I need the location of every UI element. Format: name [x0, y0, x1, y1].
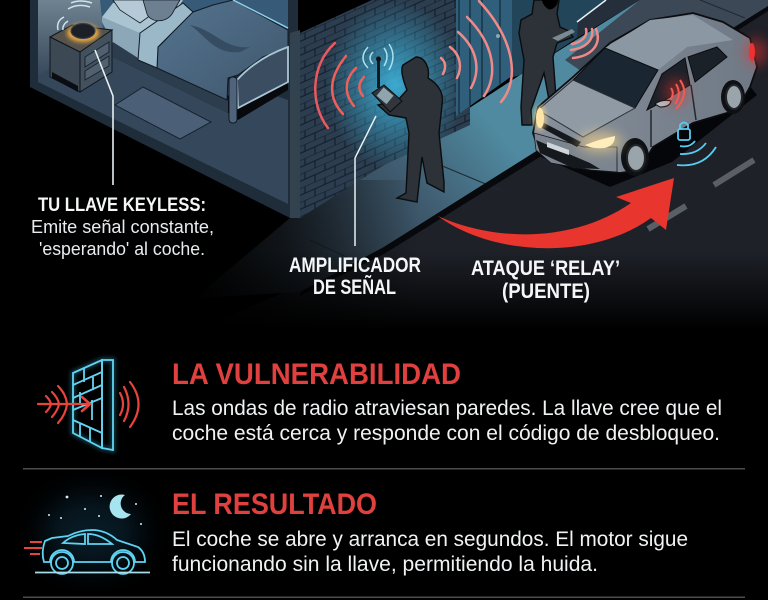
label: key: [31, 195, 214, 259]
rear wheel: [721, 80, 745, 114]
hooded figure with phone: [519, 0, 575, 125]
callout line: amplifier: [355, 116, 376, 246]
car: [533, 13, 768, 187]
bedroom: [30, 0, 298, 218]
callout line: phone: [577, 0, 606, 22]
brick wall: [290, 0, 512, 218]
label: amplifier: AMPLIFICADOR: [289, 254, 421, 277]
road: [200, 8, 768, 328]
label: relay attack: ATAQUE ‘RELAY’: [471, 257, 620, 280]
label: amplifier: DE SEÑAL: [313, 276, 396, 299]
illustration: relay attack scene: [30, 0, 768, 340]
panel: la vulnerabilidad: [38, 358, 722, 450]
icon: wall with radio waves: [38, 360, 138, 450]
heading: EL RESULTADO: [172, 488, 377, 521]
text block: [172, 397, 722, 445]
headlights: [533, 105, 622, 152]
door signal: [664, 78, 688, 109]
icon: car at night: [24, 494, 150, 574]
moon: [110, 495, 131, 519]
front wheel: [621, 138, 649, 176]
blue waves: amplifier: [363, 44, 393, 70]
text block: funcionando sin la llave, permitiendo la huida.: [172, 553, 598, 576]
label: key: TU LLAVE KEYLESS:: [38, 195, 206, 216]
curb: [300, 6, 768, 296]
tail light: [749, 43, 755, 61]
heading: LA VULNERABILIDAD: [172, 358, 461, 391]
red waves: through wall: [315, 1, 598, 128]
rug: [115, 87, 211, 139]
label: amplifier: [289, 254, 421, 299]
text block: Las ondas de radio atraviesan paredes. La llave cree que el: [172, 397, 722, 420]
label: relay attack: [471, 257, 620, 303]
text block: El coche se abre y arranca en segundos. El motor sigue: [172, 528, 688, 551]
label: relay attack: (PUENTE): [502, 280, 590, 303]
road markings: [648, 160, 754, 229]
relay arrow: [438, 178, 674, 248]
wall by door: [510, 0, 640, 78]
label: key: Emite señal constante,: [31, 217, 214, 237]
panel: el resultado: [24, 488, 688, 576]
callout line: key: [95, 50, 113, 185]
nightstand with key: [50, 1, 112, 92]
lock and signal: [677, 122, 716, 165]
hooded figure with amplifier: [372, 56, 444, 202]
sidewalk: [195, 0, 768, 298]
text block: [172, 528, 688, 576]
stars: [48, 495, 142, 525]
text block: coche está cerca y responde con el código de desbloqueo.: [172, 422, 720, 445]
bed: [102, 0, 288, 123]
label: key: 'esperando' al coche.: [39, 239, 205, 259]
